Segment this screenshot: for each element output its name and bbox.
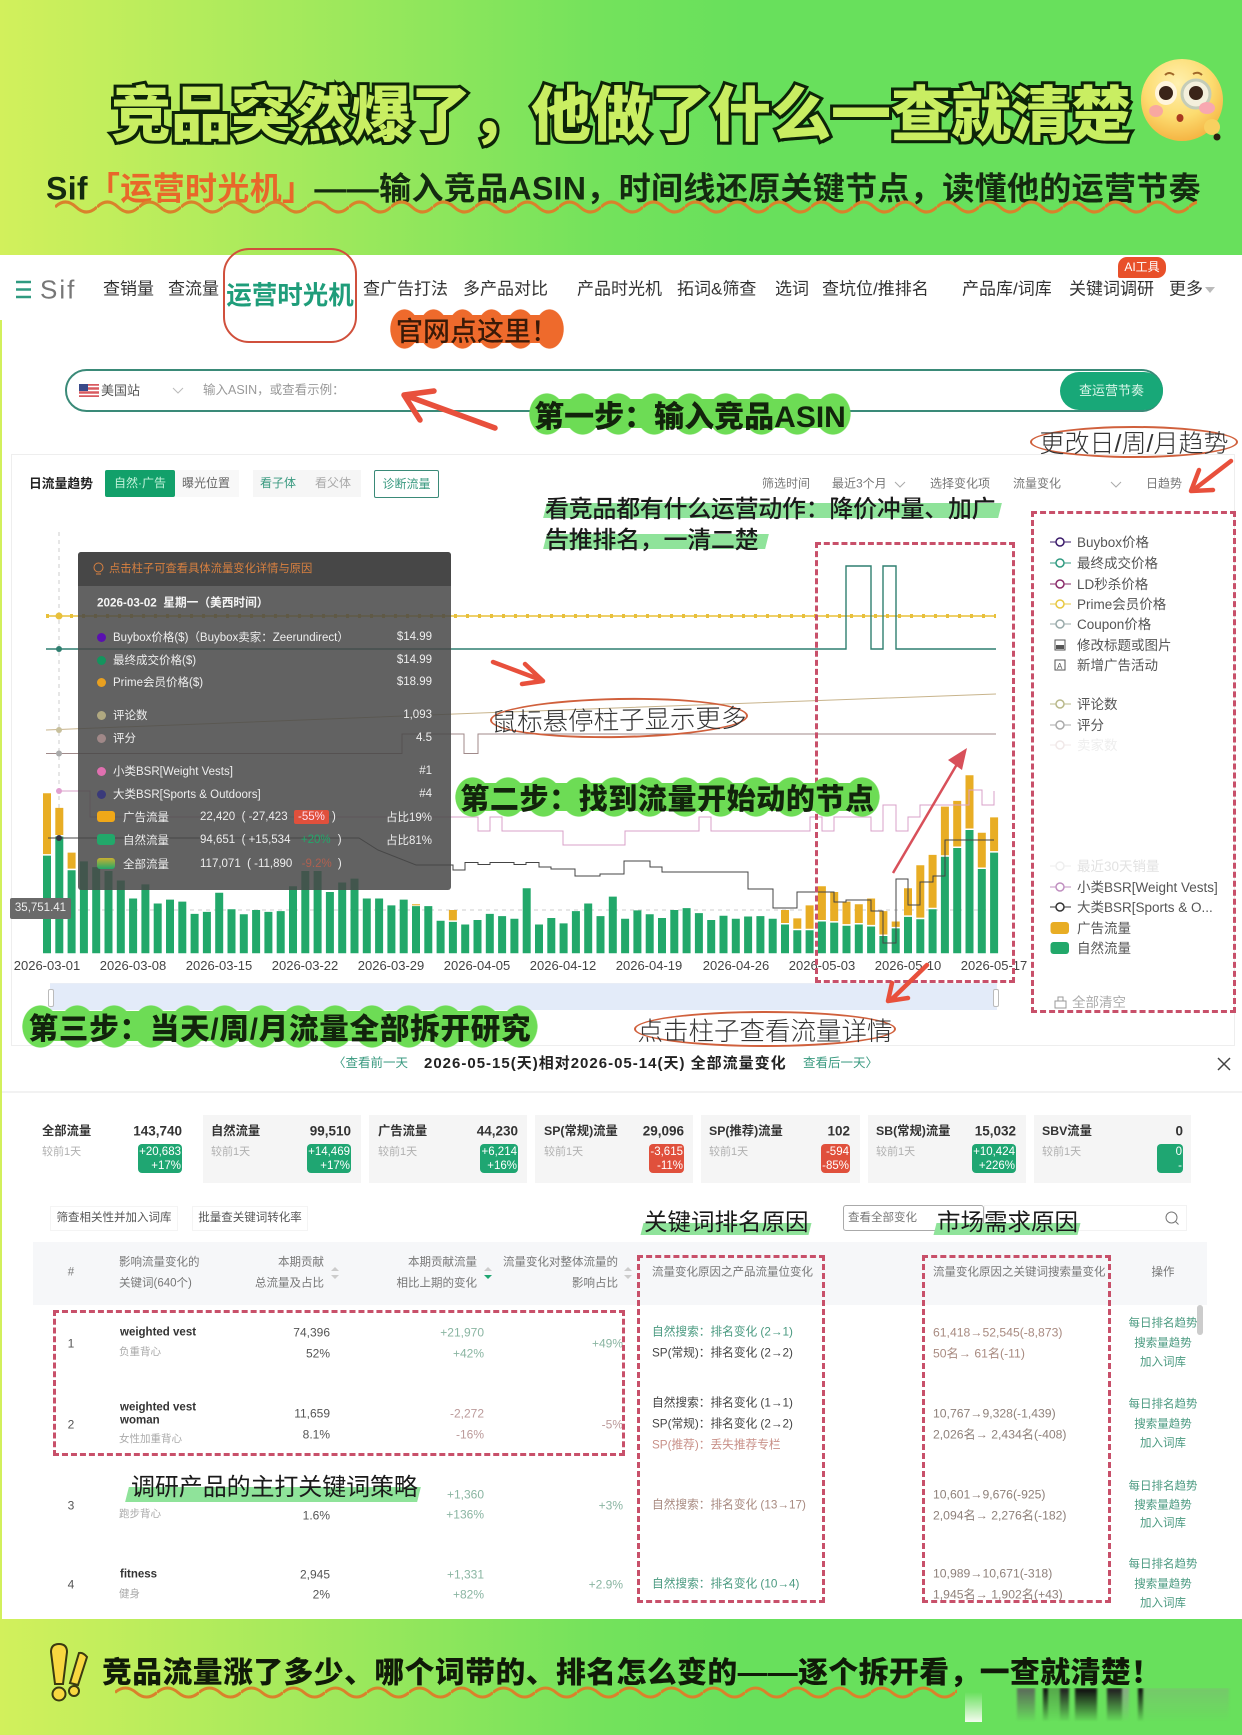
table row 4: 加入词库 [1140, 1598, 1186, 1610]
metric card: SBV: 0 [1175, 1124, 1183, 1139]
x axis dates: 2026-04-19 [616, 958, 682, 973]
highlighted menu item [223, 248, 357, 343]
metric card: SB: +10,424 [973, 1146, 1015, 1158]
filter controls: 最近3个月 [832, 476, 887, 490]
x axis dates: 2026-03-01 [14, 958, 80, 973]
navigation bar: 拓词&筛查 [677, 280, 756, 299]
metric card: total: 全部流量 [42, 1124, 91, 1138]
line: buybox price [46, 566, 996, 652]
navigation bar: 查流量 [168, 280, 219, 299]
legend: natural traffic [1050, 940, 1131, 956]
table row 1: 加入词库 [1140, 1357, 1186, 1369]
search bar contents: 美国站 [101, 383, 140, 398]
x axis dates: 2026-05-03 [789, 958, 855, 973]
table row 3: 跑步背心 [119, 1508, 161, 1520]
trend period note: 更改日/周/月趋势 [1040, 430, 1228, 458]
official site callout: 官网点这里！ [396, 316, 558, 346]
table row 2: 8.1% [303, 1427, 330, 1441]
icon: surprised emoji with magnifier [1141, 59, 1223, 141]
icon: close [1218, 1058, 1230, 1070]
metric card: SP regular: -11% [657, 1160, 683, 1172]
row: buybox: $14.99 [397, 631, 432, 643]
x axis dates: 2026-03-15 [186, 958, 252, 973]
row: final price: $14.99 [397, 654, 432, 666]
button: filter relevance [50, 1206, 178, 1231]
line: subcategory BSR [56, 788, 994, 845]
table header: 影响流量变化的 [119, 1257, 200, 1269]
metric card: SP recommended: 较前1天 [709, 1146, 748, 1158]
bars: natural traffic [43, 830, 998, 953]
table row 2: 加入词库 [1140, 1438, 1186, 1450]
legend: ad traffic [1050, 921, 1131, 936]
variant toggle [253, 470, 361, 497]
legend dashed frame [1031, 511, 1236, 1013]
filter controls: 选择变化项 [930, 476, 990, 490]
table header: 本期贡献流量 [408, 1257, 477, 1269]
table row 2: SP(常规)：排名变化 (2→2) [652, 1418, 793, 1431]
search bar [65, 369, 1163, 412]
table row 4: +2.9% [589, 1577, 623, 1591]
arrow: to ASIN input [401, 388, 498, 431]
table row 4: 10,989→10,671(-318) [933, 1566, 1052, 1580]
row: prime price: Prime会员价格($) [113, 677, 203, 689]
table row 1 [68, 1316, 1198, 1369]
row: ad traffic: 占比19% [386, 812, 432, 824]
watermark smear [1016, 1688, 1230, 1720]
legend: sellers (inactive) [1050, 737, 1118, 753]
table row 1: +49% [592, 1336, 623, 1350]
legend: Buybox: Buybox价格 [1077, 535, 1150, 550]
table row 1: 负重背心 [119, 1346, 161, 1358]
table row 2: 2,026名→ 2,434名(-408) [933, 1427, 1066, 1441]
table row 2: 10,767→9,328(-1,439) [933, 1406, 1056, 1420]
table row 2: weighted vest [120, 1402, 196, 1414]
icon: menu [16, 280, 31, 298]
table row 3: 每日排名趋势 [1128, 1481, 1198, 1493]
table header: 流量变化对整体流量的 [503, 1257, 618, 1269]
detail header: 2026-05-15(天)相对2026-05-14(天) 全部流量变化 [424, 1055, 787, 1072]
table row 4: +1,331 [447, 1567, 484, 1581]
click note: 点击柱子查看流量详情 [637, 1018, 892, 1046]
row: buybox [97, 631, 432, 644]
metric card: natural: +17% [320, 1160, 350, 1172]
metric card: natural: +14,469 [308, 1146, 350, 1158]
legend: new ad campaign: A [1057, 662, 1063, 671]
row: total traffic: 全部流量 [123, 859, 169, 871]
keywords dashed frame [53, 1310, 625, 1456]
table header [33, 1242, 1207, 1305]
table row 1: 74,396 [293, 1325, 330, 1339]
table header: 本期贡献 [278, 1257, 324, 1269]
metric card: SBV [1034, 1115, 1191, 1183]
trend heading: 日流量趋势 [29, 476, 93, 491]
metric card: SP recommended: -85% [822, 1160, 849, 1172]
legend: 30-day sales (inactive): 最近30天销量 [1077, 859, 1160, 874]
select: view all changes: 查看全部变化 [848, 1212, 917, 1224]
table header: 关键词(640个) [119, 1278, 192, 1290]
navigation bar: 选词 [775, 280, 809, 299]
line: prime price [46, 612, 996, 620]
scrollbar [1197, 1305, 1203, 1335]
legend: ad traffic: 广告流量 [1077, 921, 1131, 936]
legend: final price: 最终成交价格 [1077, 555, 1158, 571]
row: natural traffic [97, 834, 432, 847]
variant toggle: 看父体 [315, 476, 351, 490]
metric card: SP regular: -3,615 [650, 1146, 683, 1158]
table row 3: 2,094名→ 2,276名(-182) [933, 1508, 1066, 1522]
metric card: natural: 99,510 [310, 1124, 351, 1139]
metric card: SP regular: 较前1天 [544, 1146, 583, 1158]
tab group [105, 470, 239, 497]
table header: 相比上期的变化 [396, 1278, 477, 1290]
icon: US flag [79, 384, 99, 397]
row: rating: 评分 [113, 733, 136, 745]
annotation: keyword rank reason: 关键词排名原因 [644, 1209, 808, 1235]
logo text: Sif [40, 275, 76, 305]
tab group: 曝光位置 [182, 476, 230, 490]
table row 4 [68, 1558, 1198, 1610]
table row 1: 1 [68, 1336, 74, 1350]
table row 2: 自然搜索：排名变化 (1→1) [652, 1397, 793, 1410]
metric card: ads [369, 1115, 527, 1183]
row: subcategory BSR: 小类BSR[Weight Vests] [113, 766, 233, 778]
table row 1: +21,970 [440, 1325, 484, 1339]
legend: clear all: 全部清空 [1072, 994, 1126, 1010]
closing statement: 竞品流量涨了多少、哪个词带的、排名怎么变的——逐个拆开看，一查就清楚！ [102, 1657, 1161, 1690]
search button: 查运营节奏 [1079, 383, 1144, 398]
legend: natural traffic: 自然流量 [1077, 940, 1131, 956]
button: keyword conversion: 批量查关键词转化率 [198, 1212, 302, 1224]
row: total traffic [97, 858, 342, 871]
y axis value tag: 35,751.41 [15, 902, 66, 914]
line: reviews [46, 694, 996, 733]
hover note: 鼠标悬停柱子显示更多 [491, 704, 747, 737]
subtitle: Sif「运营时光机」——输入竞品ASIN，时间线还原关键节点，读懂他的运营节奏 [46, 170, 1201, 206]
metric card: SB: 15,032 [975, 1124, 1016, 1139]
table header: 流量变化原因之关键词搜索量变化 [933, 1267, 1106, 1279]
highlighted menu item: 运营时光机 [226, 282, 354, 310]
top banner [0, 0, 1242, 255]
tooltip: 点击柱子可查看具体流量变化详情与原因 [109, 563, 312, 575]
table row 2: 搜索量趋势 [1134, 1419, 1192, 1431]
row: natural traffic: 占比81% [386, 835, 432, 847]
table row 1: +42% [453, 1346, 484, 1360]
tooltip header [78, 552, 451, 586]
legend: subcategory BSR: 小类BSR[Weight Vests] [1077, 880, 1218, 895]
legend: rating: 评分 [1077, 718, 1104, 733]
navigation bar: 关键词调研 [1069, 280, 1154, 299]
row: prime price: $18.99 [397, 676, 432, 688]
metric card: SBV: SBV流量 [1042, 1124, 1092, 1138]
title: 竞品突然爆了，他做了什么一查就清楚 [111, 82, 1131, 149]
metric card: total [34, 1115, 192, 1183]
metric card: SB: SB(常规)流量 [876, 1124, 950, 1138]
arrow: to hover note [490, 660, 546, 686]
annotation: market demand reason: 市场需求原因 [937, 1209, 1078, 1235]
navigation bar: 查广告打法 [363, 280, 448, 299]
row: total traffic: 117,071 ( -11,890 -9.2% ) [200, 858, 342, 870]
table row 3: 10,601→9,676(-925) [933, 1487, 1045, 1501]
metric card: ads: +16% [487, 1160, 517, 1172]
detail header: 〈查看前一天 [333, 1056, 408, 1070]
y axis value tag [10, 898, 71, 919]
detail header: 查看后一天〉 [803, 1056, 878, 1070]
chevron [172, 388, 184, 394]
table header: 操作 [1152, 1267, 1174, 1279]
filter controls: 日趋势 [1146, 476, 1182, 490]
row: category BSR [97, 788, 432, 801]
table row 3 [68, 1480, 1198, 1530]
variant toggle: 看子体 [260, 476, 296, 490]
metric card: SB: +226% [979, 1160, 1015, 1172]
tooltip [78, 552, 451, 890]
combo chart [14, 532, 1027, 973]
row: reviews: 1,093 [403, 709, 432, 721]
table row 4: 自然搜索：排名变化 (10→4) [652, 1578, 799, 1591]
bars: ad traffic [43, 775, 998, 934]
navigation bar: 多产品对比 [463, 280, 548, 299]
average line and hover guide [46, 532, 996, 953]
x axis dates: 2026-05-10 [875, 958, 941, 973]
legend: prime: Prime会员价格 [1077, 597, 1167, 612]
table row 1: 50名→ 61名(-11) [933, 1346, 1025, 1360]
select: view all changes [843, 1205, 984, 1231]
legend: rating [1050, 718, 1104, 733]
row: natural traffic: 自然流量 [123, 835, 169, 847]
panel: daily traffic trend [11, 454, 1235, 1046]
row: ad traffic [97, 810, 432, 824]
navigation bar: 查坑位/推排名 [822, 280, 929, 299]
tab group: 自然·广告 [114, 476, 166, 490]
row: category BSR: #4 [419, 788, 432, 800]
table row 3: 自然搜索：排名变化 (13→17) [652, 1499, 806, 1512]
table row 4: 健身 [119, 1588, 140, 1600]
metric card: natural: 自然流量 [211, 1124, 260, 1138]
legend: reviews [1050, 697, 1118, 712]
navigation bar: 查销量 [103, 280, 154, 299]
metric card: SBV: 较前1天 [1042, 1146, 1081, 1158]
table row 4: 2% [313, 1587, 330, 1601]
row: category BSR: 大类BSR[Sports & Outdoors] [113, 789, 261, 801]
row: rating [97, 732, 432, 745]
table row 3: 3 [68, 1498, 74, 1512]
legend: sellers (inactive): 卖家数 [1077, 737, 1118, 753]
legend: title change: 修改标题或图片 [1077, 638, 1172, 653]
metric card: SP recommended: 102 [827, 1124, 850, 1139]
x axis dates: 2026-04-26 [703, 958, 769, 973]
metric card: total: 较前1天 [42, 1146, 81, 1158]
legend: new ad campaign: 新增广告活动 [1077, 658, 1158, 673]
annotation highlights [543, 496, 1002, 554]
x axis dates [14, 958, 1027, 973]
AI tool badge [1118, 257, 1166, 278]
navigation bar: 产品库/词库 [962, 280, 1052, 299]
row: subcategory BSR: #1 [419, 765, 432, 777]
table row 2: 2 [68, 1417, 74, 1431]
official site callout [390, 309, 564, 349]
table row 1: 61,418→52,545(-8,873) [933, 1325, 1062, 1339]
row: reviews: 评论数 [113, 710, 148, 722]
table row 3: 搜索量趋势 [1134, 1500, 1192, 1512]
table row 4: 1,945名→ 1,902名(+43) [933, 1587, 1063, 1601]
table row 2: -5% [602, 1417, 623, 1431]
table row 2: SP(推荐)：丢失推荐专栏 [652, 1439, 781, 1452]
filter controls: 筛选时间 [762, 476, 810, 490]
navigation bar [16, 248, 1215, 349]
table header: 影响占比 [572, 1278, 618, 1290]
row: rating: 4.5 [416, 732, 432, 744]
panel: traffic detail [2, 1048, 1242, 1619]
filter controls: 流量变化 [1013, 476, 1061, 490]
button: keyword conversion [192, 1206, 308, 1231]
divider [2, 1091, 1242, 1093]
metric card: SP recommended [701, 1115, 860, 1183]
table row 4: fitness [120, 1569, 157, 1581]
search bar contents [79, 372, 1163, 410]
table header: # [68, 1267, 74, 1279]
table row 3: +1,360 [447, 1487, 484, 1501]
row: ad traffic: 22,420 ( -27,423 -55% ) [200, 811, 336, 823]
step 1 badge: 第一步：输入竞品ASIN [534, 401, 846, 434]
legend: coupon: Coupon价格 [1077, 617, 1152, 632]
row: reviews [97, 709, 432, 722]
table row 4: 2,945 [300, 1567, 330, 1581]
row: ad traffic: 广告流量 [123, 812, 169, 824]
row: final price [97, 654, 432, 667]
subtitle wavy underline [55, 200, 1197, 214]
step 2 badge: 第二步：找到流量开始动的节点 [460, 784, 875, 816]
table row 2 [68, 1396, 1198, 1452]
metric card: SP recommended: SP(推荐)流量 [709, 1124, 783, 1138]
diagnose button [374, 470, 439, 498]
table row 3: +136% [446, 1507, 484, 1521]
watermark mark [965, 1692, 982, 1722]
table row 3: 加入词库 [1140, 1518, 1186, 1530]
demand reason dashed frame [922, 1255, 1111, 1603]
table row 4: 搜索量趋势 [1134, 1579, 1192, 1591]
closing wavy underline [115, 1686, 957, 1698]
table row 2: 女性加重背心 [119, 1433, 182, 1445]
left edge strip [0, 320, 2, 1620]
metric card: ads: 较前1天 [378, 1146, 417, 1158]
legend: category BSR: 大类BSR[Sports & O... [1077, 900, 1213, 915]
detail header [333, 1055, 878, 1072]
arrow: to slider [886, 962, 930, 1004]
table row 3: +3% [599, 1498, 623, 1512]
AI tool badge: AI工具 [1124, 260, 1160, 274]
metric card: ads: 广告流量 [378, 1124, 427, 1138]
dropdown caret [1205, 287, 1215, 298]
table row 1: 每日排名趋势 [1128, 1318, 1198, 1330]
search input [984, 1205, 1187, 1231]
icon: exclamation marks [50, 1643, 88, 1702]
legend: reviews: 评论数 [1077, 697, 1118, 712]
row: natural traffic: 94,651 ( +15,534 +20% ) [200, 834, 342, 846]
x axis dates: 2026-03-08 [100, 958, 166, 973]
button: filter relevance: 筛查相关性并加入词库 [56, 1212, 172, 1224]
tooltip: 2026-03-02 星期一（美西时间） [97, 597, 268, 610]
rank reason dashed frame [637, 1255, 825, 1603]
legend [1050, 535, 1218, 1010]
metric card: natural: 较前1天 [211, 1146, 250, 1158]
line: category BSR [48, 835, 994, 943]
metric card: SBV: 0 [1176, 1146, 1182, 1158]
table row 4: +82% [453, 1587, 484, 1601]
line: rating [46, 734, 996, 756]
legend: final price [1050, 555, 1158, 571]
table header: 总流量及占比 [255, 1278, 324, 1290]
bottom banner [0, 1619, 1242, 1735]
metric card: SB: 较前1天 [876, 1146, 915, 1158]
diagnose button: 诊断流量 [382, 477, 430, 491]
table row 1: 52% [306, 1346, 330, 1360]
navigation bar: 更多 [1169, 280, 1203, 299]
metric card: natural [203, 1115, 361, 1183]
table row 3: 1.6% [303, 1508, 330, 1522]
step 3 badge: 第三步：当天/周/月流量全部拆开研究 [29, 1012, 531, 1046]
row: subcategory BSR [97, 765, 432, 778]
legend: lightning deal: LD秒杀价格 [1077, 577, 1149, 592]
metric card: ads: +6,214 [482, 1146, 517, 1158]
x axis dates: 2026-05-17 [961, 958, 1027, 973]
annotation: main keyword strategy: 调研产品的主打关键词策略 [131, 1474, 418, 1501]
x axis dates: 2026-03-29 [358, 958, 424, 973]
table row 2: 11,659 [294, 1406, 330, 1420]
navigation bar: 产品时光机 [577, 280, 662, 299]
metric card: SBV: - [1178, 1160, 1182, 1172]
metric card: SP recommended: -594 [826, 1146, 849, 1158]
table row 1: 搜索量趋势 [1134, 1338, 1192, 1350]
icon: bulb [94, 562, 104, 574]
table header: 流量变化原因之产品流量位变化 [652, 1267, 813, 1279]
table row 4: 4 [68, 1577, 74, 1591]
row: buybox: Buybox价格($)（Buybox卖家：Zeerundirect） [113, 632, 349, 644]
table row 1: SP(常规)：排名变化 (2→2) [652, 1347, 793, 1360]
table row 2: 每日排名趋势 [1128, 1399, 1198, 1411]
table row 2: -16% [456, 1427, 484, 1441]
metric card: SB [868, 1115, 1026, 1183]
metric card: total: +20,683 [139, 1146, 181, 1158]
search bar contents: 输入ASIN，或查看示例： [203, 383, 345, 397]
table row 2: -2,272 [450, 1406, 484, 1420]
table row 4: 每日排名趋势 [1128, 1559, 1198, 1571]
row: prime price [97, 676, 432, 689]
arrow: to trend selector [1188, 458, 1234, 494]
metric card: SP regular: 29,096 [643, 1124, 684, 1139]
metric card: ads: 44,230 [477, 1124, 518, 1139]
x axis dates: 2026-04-05 [444, 958, 510, 973]
period dashed frame [815, 542, 1015, 983]
metric card: total: 143,740 [133, 1124, 182, 1139]
operation annotation text: 看竞品都有什么运营动作：降价冲量、加广告推排名，一清二楚 [545, 496, 995, 554]
metric card: SP regular: SP(常规)流量 [544, 1124, 618, 1138]
table row 1: weighted vest [120, 1327, 196, 1339]
table row 2: woman [120, 1415, 160, 1427]
table row 1: 自然搜索：排名变化 (2→1) [652, 1326, 793, 1339]
filter controls [762, 476, 1182, 490]
x axis dates: 2026-04-12 [530, 958, 596, 973]
x axis dates: 2026-03-22 [272, 958, 338, 973]
row: final price: 最终成交价格($) [113, 655, 196, 667]
search button [1060, 372, 1163, 410]
metric card: total: +17% [151, 1160, 181, 1172]
range slider [50, 983, 997, 1010]
arrow: rising traffic [892, 748, 967, 874]
metric card: SP regular [535, 1115, 693, 1183]
